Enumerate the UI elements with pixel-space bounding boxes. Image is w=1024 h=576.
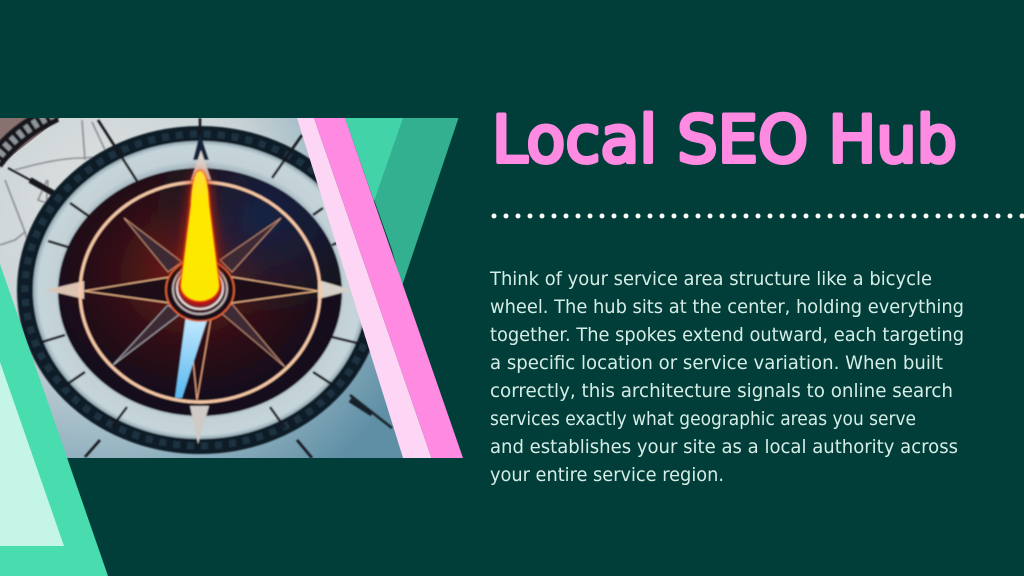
body text: together. The spokes extend outward, each targeting [490,324,964,346]
needles outside compass [6,166,32,182]
body text: wheel. The hub sits at the center, holding everything [490,296,964,318]
star rays [113,218,285,367]
inner pale ring [33,141,367,439]
decorative chevron: green [345,118,458,286]
body text: and establishes your site as a local authority across [490,436,958,458]
body text: your entire service region. [490,464,724,486]
yellow needle [180,170,220,302]
body text: correctly, this architecture signals to online search [490,380,953,402]
body text: Think of your service area structure like a bicycle [489,268,932,290]
decorative triangle: bottom left [0,264,108,576]
compass image [0,113,410,458]
decorative chevron: pink stripes [297,118,463,458]
body text: services exactly what geographic areas you serve [490,408,916,430]
blue needle [174,318,208,400]
glow [180,170,220,285]
dark disc [58,168,342,416]
cardinal pointers [193,133,209,160]
body text: a specific location or service variation. When built [490,352,943,374]
body text [489,268,964,486]
title: Local SEO Hub [492,103,957,178]
corner dial [0,113,55,162]
map lines [0,120,106,246]
peach ring [80,182,320,402]
outer dark ring [25,134,375,446]
ring ticks [42,118,357,458]
hub [166,259,234,321]
dotted divider [494,214,1024,218]
